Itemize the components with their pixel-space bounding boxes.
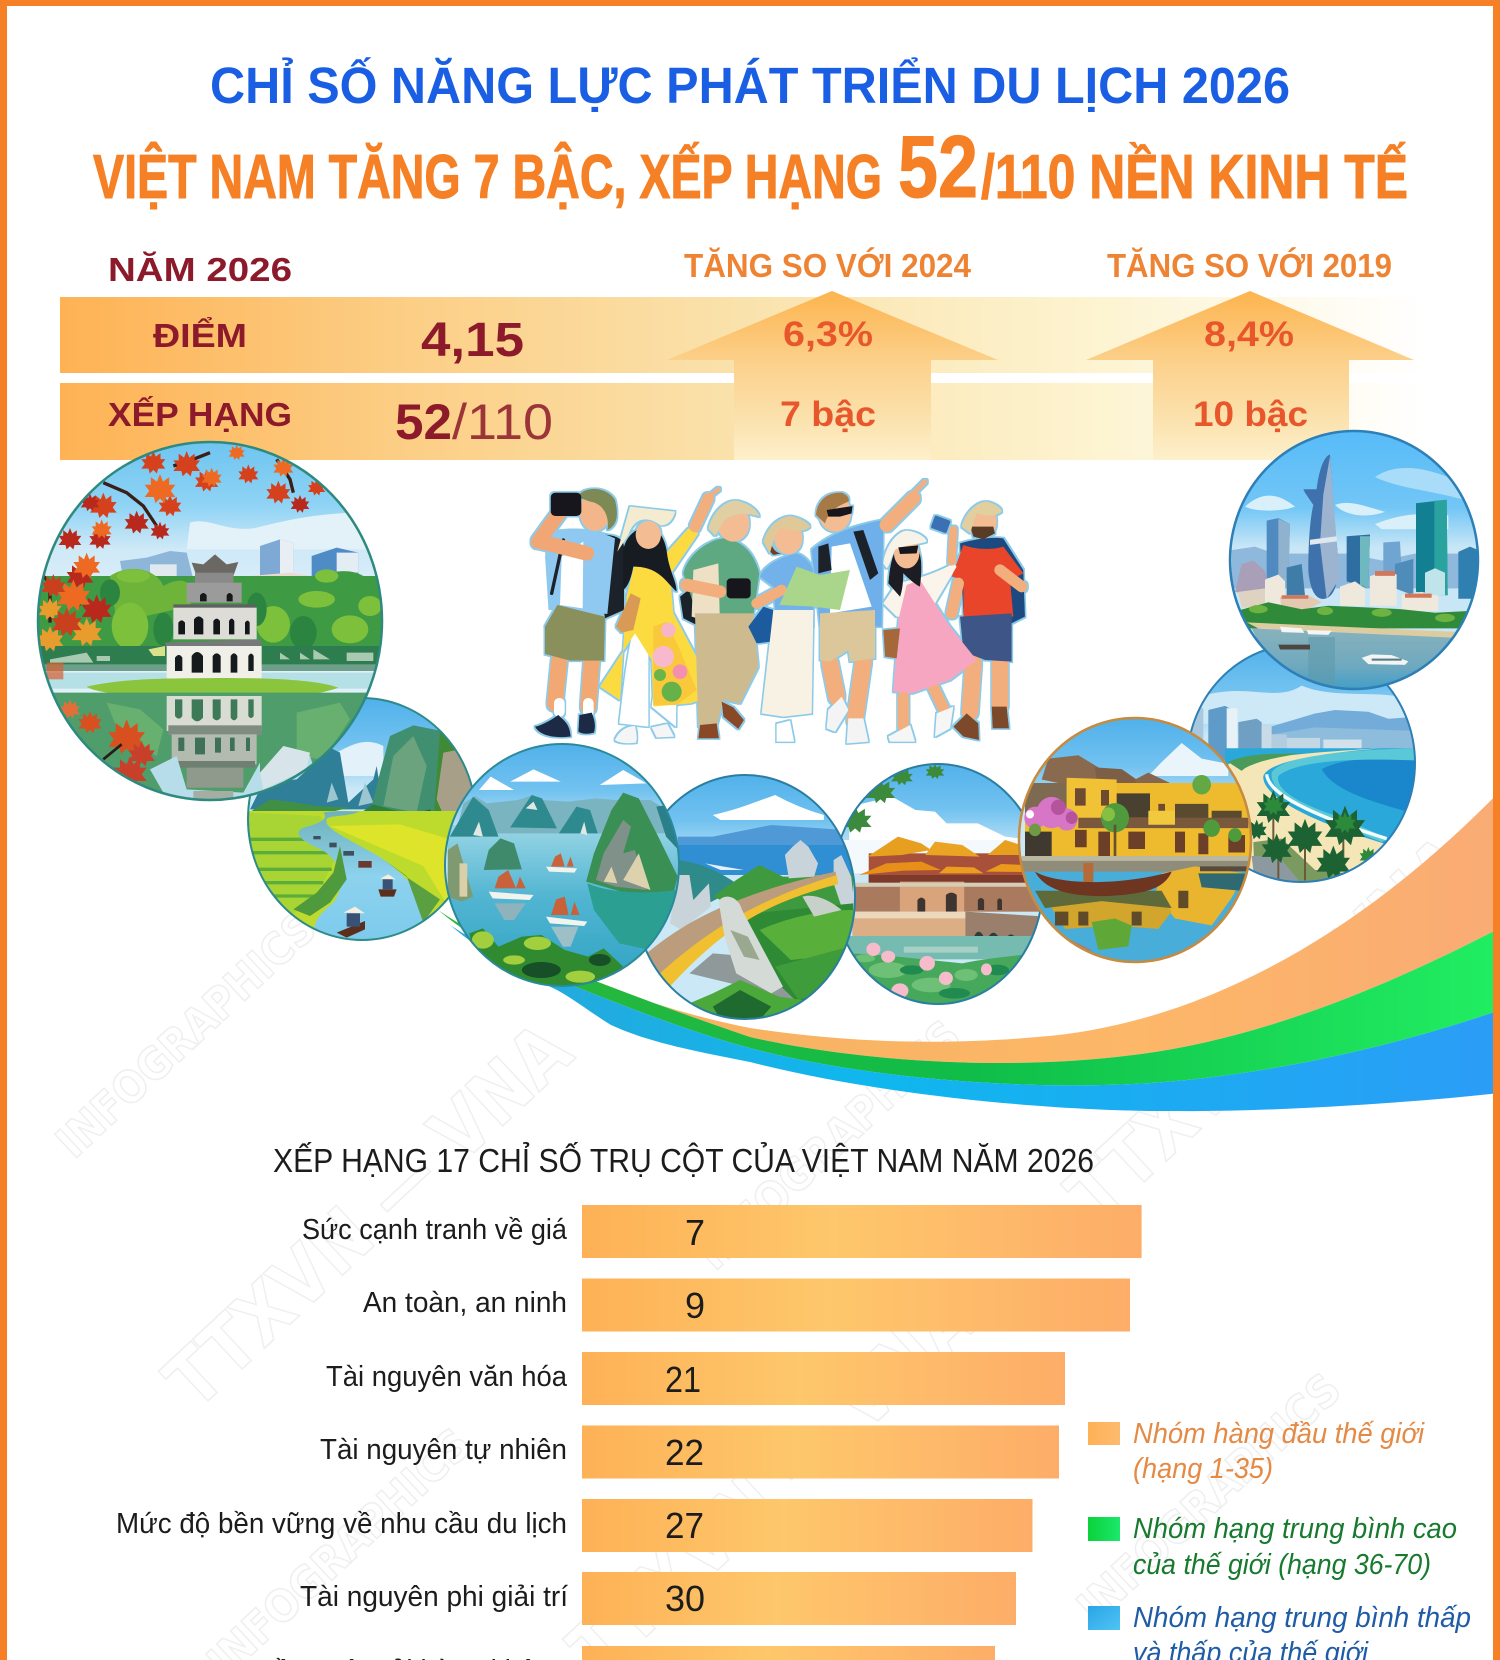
bar row: safety: 9 (685, 1285, 705, 1326)
photo circle: Golden Bridge Da Nang (647, 776, 854, 1018)
table headings: TĂNG SO VỚI 2019 (1107, 247, 1392, 284)
bar row: cultural resources: Tài nguyên văn hóa (326, 1361, 568, 1393)
tourist 3: older man (680, 501, 759, 738)
watermarks: TTXVN — VNA (148, 1005, 589, 1425)
row: rank: 52 (395, 394, 452, 450)
photo circle: Ho Chi Minh City skyline (1227, 428, 1483, 693)
row: rank: /110 (452, 394, 553, 450)
circle outline: Nha Trang (1187, 644, 1415, 882)
circle outline: HCMC (1230, 431, 1478, 689)
legend item: top group: (hạng 1-35) (1133, 1453, 1273, 1485)
map (779, 567, 850, 610)
tourist 2: ao dai (600, 489, 718, 743)
title: line 2: /110 NỀN KINH TẾ (981, 143, 1408, 212)
legend item: upper-middle group: của thế giới (hạng 36-70) (1133, 1549, 1431, 1581)
photo circle: Hoan Kiem Lake Turtle Tower (33, 439, 387, 806)
row: rank: 10 bậc (1193, 395, 1308, 434)
bar row: non-leisure resources (300, 1572, 1016, 1625)
bar row: price competitiveness: 7 (685, 1212, 705, 1253)
photo circle: Hue imperial citadel (842, 765, 1040, 1003)
table headings: TĂNG SO VỚI 2024 (684, 247, 972, 284)
circle outline: Ninh Binh (248, 698, 476, 940)
watermarks: INFOGRAPHICS (1068, 1364, 1351, 1633)
watermarks (47, 818, 1491, 1660)
bar row: cultural resources (326, 1352, 1065, 1405)
legend item: top group: Nhóm hàng đầu thế giới (1133, 1418, 1425, 1450)
circle outline: Hue (833, 764, 1043, 1004)
row: score: 6,3% (783, 315, 873, 354)
legend item: upper-middle group: Nhóm hạng trung bình cao (1133, 1513, 1457, 1545)
circle outline: Hoi An (1019, 718, 1251, 962)
watermarks: INFOGRAPHICS (688, 1011, 971, 1280)
bar row: natural resources: Tài nguyên tự nhiên (320, 1434, 567, 1466)
legend item: lower group (1088, 1602, 1471, 1660)
tourist 7: man with red shirt (952, 502, 1025, 740)
table headings (108, 247, 1392, 288)
watermarks: INFOGRAPHICS (47, 902, 327, 1168)
circle outline: Hoan Kiem (38, 442, 382, 800)
bar row: tourism demand sustainability (116, 1499, 1032, 1552)
arrow: increase vs 2019 (1086, 291, 1414, 460)
illustration: group of tourists (535, 482, 1025, 743)
title: line 2: 52 (898, 117, 978, 216)
bar row: non-leisure resources: 30 (665, 1578, 705, 1619)
legend item: top group (1088, 1418, 1425, 1485)
score table bands (60, 297, 1425, 460)
bar row: non-leisure resources: Tài nguyên phi giải trí (300, 1581, 568, 1613)
title: line 2: VIỆT NAM TĂNG 7 BẬC, XẾP HẠNG (93, 143, 882, 212)
legend item: upper-middle group (1088, 1513, 1457, 1581)
tourist 4: woman with map (748, 516, 813, 742)
tourist 6: woman with phone (883, 515, 977, 742)
legend item: lower group: Nhóm hạng trung bình thấp (1133, 1602, 1471, 1634)
row: rank (108, 394, 1308, 450)
title: line 1: CHỈ SỐ NĂNG LỰC PHÁT TRIỂN DU LỊCH 2026 (210, 56, 1290, 114)
bar chart: 17 pillars (116, 1205, 1142, 1660)
row: score (153, 314, 1294, 367)
bar row: safety: An toàn, an ninh (363, 1287, 567, 1319)
row: rank: 7 bậc (780, 395, 876, 434)
bar row: price competitiveness: Sức cạnh tranh về giá (302, 1214, 568, 1246)
circle outline: Ha Long Bay (445, 744, 679, 986)
tourist 5: man pointing (812, 482, 925, 743)
bar row: natural resources (320, 1426, 1059, 1478)
circle outline: Golden Bridge (635, 775, 855, 1019)
bar row: air transport infrastructure (224, 1646, 995, 1660)
bar row: safety (363, 1278, 1130, 1332)
tourist 1: photographer (535, 489, 624, 737)
photo circle: Ha Long Bay (444, 742, 682, 988)
bar row: price competitiveness (302, 1205, 1142, 1258)
photo circle: Nha Trang beach (1192, 651, 1414, 881)
bar row: tourism demand sustainability: Mức độ bền vững về nhu cầu du lịch (116, 1508, 567, 1540)
row: score: 8,4% (1204, 315, 1294, 354)
arrow: increase vs 2024 (667, 291, 998, 460)
title: line 2 (93, 117, 1408, 216)
bar row: cultural resources: 21 (665, 1359, 701, 1400)
row: rank: XẾP HẠNG (108, 396, 292, 433)
photo circle: Hoi An ancient town (1018, 717, 1255, 964)
ribbon: orange, green, blue wave (438, 791, 1500, 1111)
bar row: tourism demand sustainability: 27 (665, 1505, 704, 1546)
row: score: ĐIỂM (153, 317, 247, 354)
row: score: 4,15 (421, 314, 524, 367)
chart title: XẾP HẠNG 17 CHỈ SỐ TRỤ CỘT CỦA VIỆT NAM NĂM 2026 (273, 1141, 1094, 1179)
table headings: NĂM 2026 (108, 251, 292, 288)
bar row: natural resources: 22 (665, 1432, 704, 1473)
legend (1088, 1418, 1471, 1660)
photo circle: Ninh Binh river valley (243, 696, 480, 944)
